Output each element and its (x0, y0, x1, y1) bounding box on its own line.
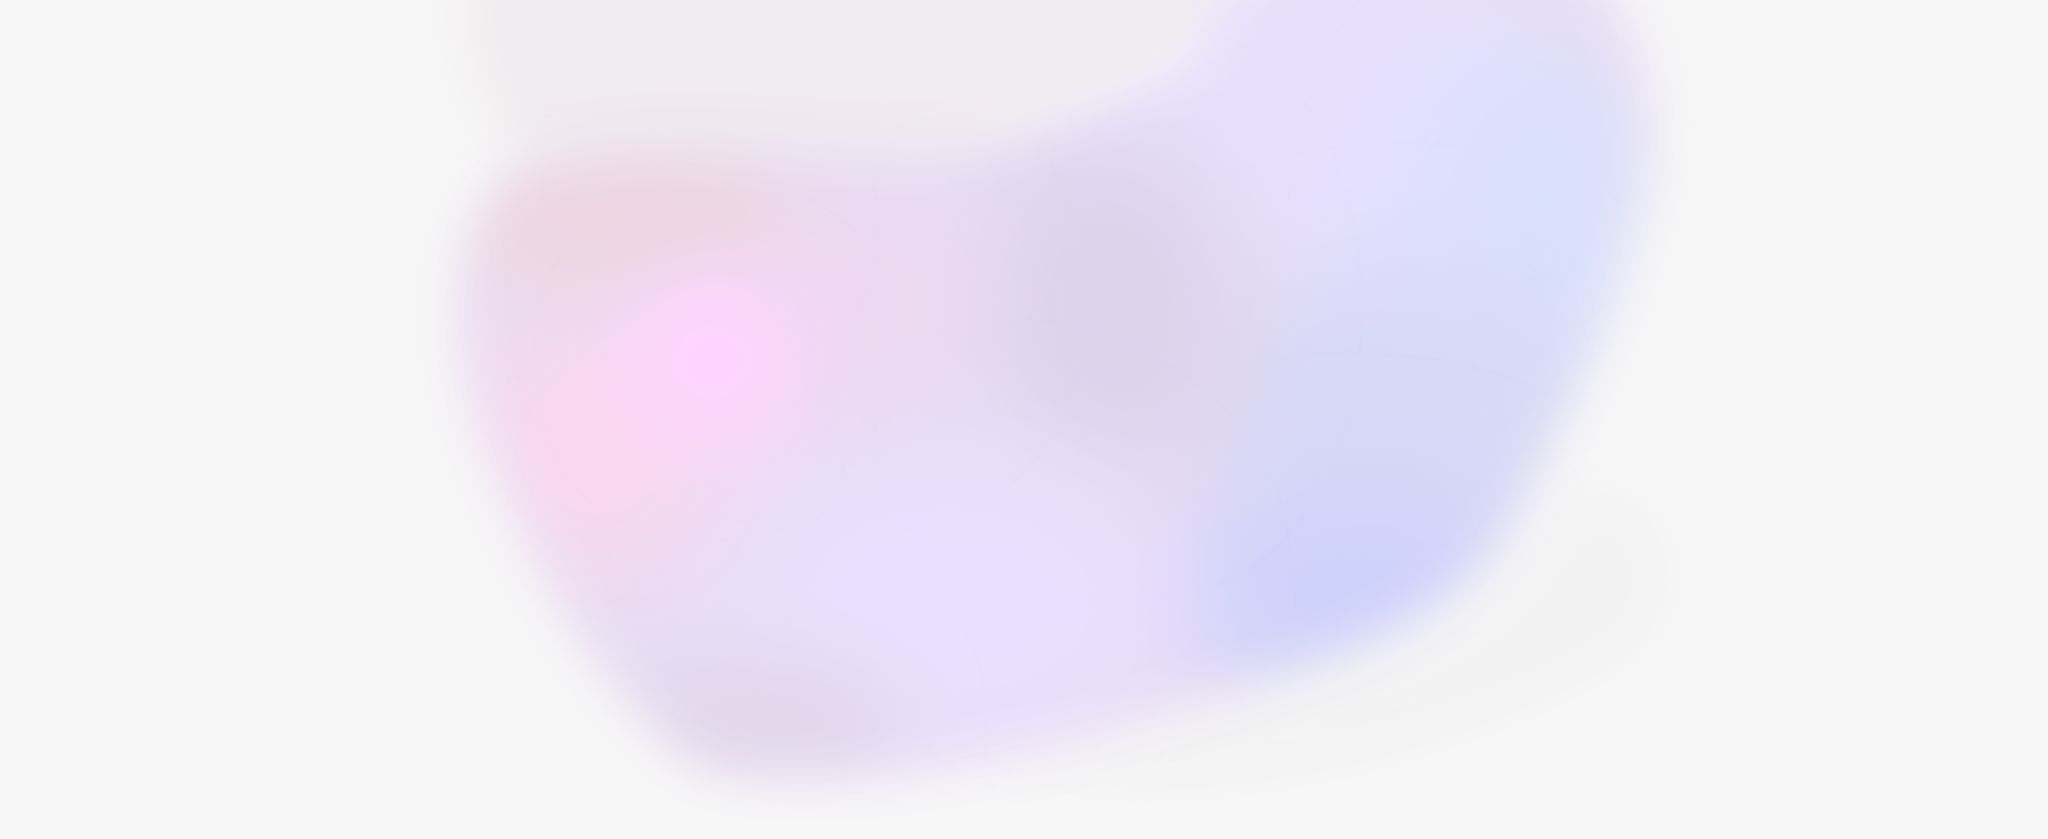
colour field: hot pink highlight (625, 270, 805, 450)
gradient blob background (446, 0, 1663, 796)
colour field: dusky mauve centre (1028, 156, 1222, 413)
colour field: pink centre-left (720, 190, 960, 410)
colour field: periwinkle mid right (1233, 284, 1534, 498)
main blob body (446, 0, 1654, 780)
soft haze: top left (465, 0, 1260, 165)
colour field: lavender upper right (1158, 0, 1459, 246)
soft grey haze: bottom right (1000, 484, 1669, 789)
colour field: pink left (498, 333, 700, 562)
colour field: periwinkle lower right (1178, 494, 1485, 680)
colour field: dusky pink upper left (486, 158, 768, 290)
colour field: lavender lower centre (764, 456, 1130, 731)
colour fields masked to blob (446, 0, 1663, 796)
colour field: dusky bottom (710, 657, 883, 752)
colour field: pale blue right (1435, 81, 1630, 327)
